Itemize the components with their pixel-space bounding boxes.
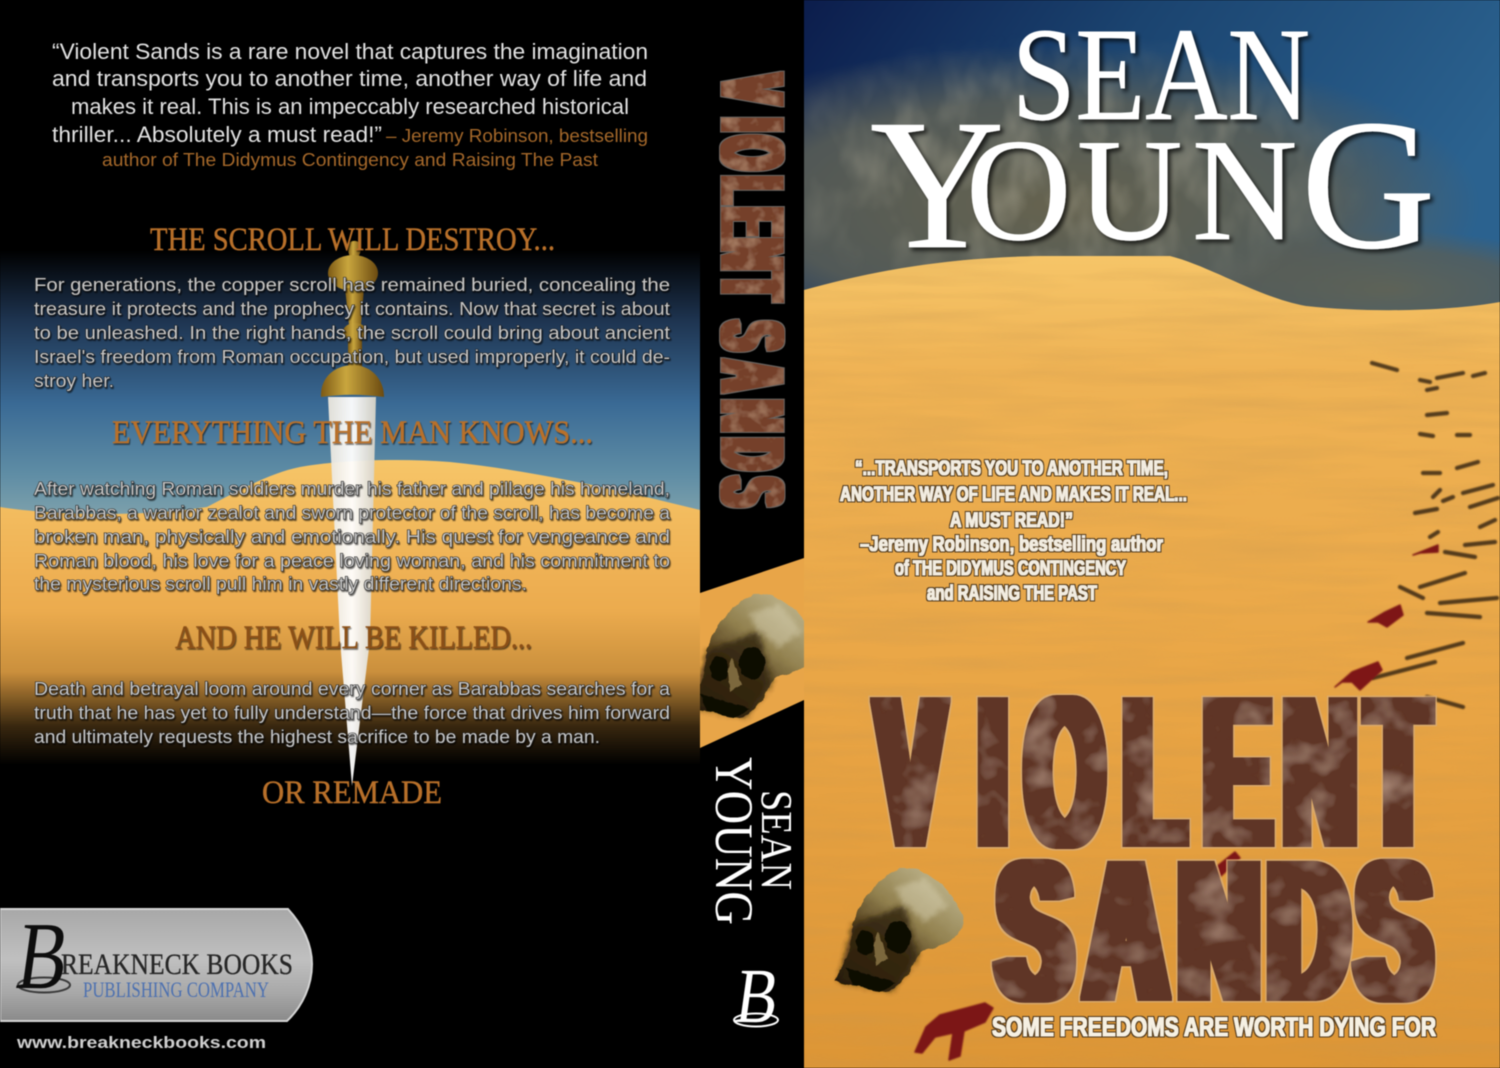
hilt bbox=[321, 241, 384, 397]
front review quote: ANOTHER WAY OF LIFE AND MAKES IT REAL... bbox=[840, 483, 1187, 506]
heading: everything the man knows: EVERYTHING THE MAN KNOWS... bbox=[112, 415, 593, 451]
blood splatter bbox=[915, 1003, 993, 1060]
book title: violent: VIOLENT bbox=[877, 654, 1429, 891]
paragraph: Barabbas bbox=[34, 479, 671, 594]
author name: young: O bbox=[966, 109, 1071, 271]
logo B mark: B bbox=[11, 902, 76, 1009]
quote: back cover review: and transports you to another time, another way of life and bbox=[52, 66, 647, 91]
paragraph: Barabbas: broken man, physically and emotionally. His quest for vengeance and bbox=[34, 527, 670, 547]
quote: back cover review: thriller... Absolutely a must read!” bbox=[52, 122, 382, 147]
paragraph: scroll: treasure it protects and the prophecy it contains. Now that secret is about bbox=[34, 299, 670, 319]
paragraph: Barabbas: Barabbas, a warrior zealot and sworn protector of the scroll, has become a bbox=[34, 503, 671, 523]
paragraph: Barabbas: After watching Roman soldiers murder his father and pillage his homeland, bbox=[34, 479, 670, 499]
paragraph: scroll: stroy her. bbox=[34, 371, 114, 391]
spine title: violent sands: VIOLENT SANDS bbox=[703, 75, 801, 506]
spine author: young: YOUNG bbox=[704, 757, 764, 925]
icon: sword bbox=[321, 241, 384, 786]
footprints bbox=[1372, 363, 1498, 707]
icon: publisher logo panel bbox=[0, 902, 312, 1021]
author name: young: G bbox=[1301, 82, 1435, 288]
blood stains bbox=[1190, 545, 1438, 892]
publisher name: REAKNECK BOOKS bbox=[61, 948, 293, 981]
quote: back cover review: – Jeremy Robinson, bestselling bbox=[386, 126, 648, 146]
spine background bbox=[700, 0, 804, 1068]
quote: back cover review: author of The Didymus Contingency and Raising The Past bbox=[102, 150, 598, 170]
paragraph: betrayal bbox=[34, 679, 671, 747]
paragraph: scroll bbox=[34, 275, 670, 391]
paragraph: scroll: For generations, the copper scroll has remained buried, concealing the bbox=[34, 275, 670, 295]
icon: spine skull bbox=[699, 594, 804, 722]
front review quote: of THE DIDYMUS CONTINGENCY bbox=[895, 557, 1126, 580]
paragraph: betrayal: truth that he has yet to fully understand—the force that drives him forward bbox=[34, 703, 670, 723]
front review quote: –Jeremy Robinson, bestselling author bbox=[860, 533, 1163, 556]
heading: or remade: OR REMADE bbox=[262, 775, 442, 811]
front review quote bbox=[840, 457, 1187, 605]
back cover background bbox=[0, 0, 700, 1068]
icon: front skull bbox=[835, 868, 963, 992]
icon: spine B logo: B bbox=[731, 952, 785, 1039]
front cover background bbox=[803, 0, 1500, 1068]
author name: young: U bbox=[1077, 109, 1182, 271]
quote: back cover review: makes it real. This is an impeccably researched historical bbox=[71, 94, 629, 119]
paragraph: Barabbas: the mysterious scroll pull him in vastly different directions. bbox=[34, 574, 527, 594]
heading: the scroll will destroy: THE SCROLL WILL DESTROY... bbox=[150, 222, 555, 258]
quote: back cover review: “Violent Sands is a rare novel that captures the imagination bbox=[52, 39, 648, 64]
paragraph: betrayal: Death and betrayal loom around every corner as Barabbas searches for a bbox=[34, 679, 671, 699]
paragraph: Barabbas: Roman blood, his love for a peace loving woman, and his commitment to bbox=[34, 551, 670, 571]
front review quote: and RAISING THE PAST bbox=[927, 582, 1097, 605]
author name: sean: SEAN bbox=[1012, 0, 1310, 148]
front review quote: “...TRANSPORTS YOU TO ANOTHER TIME, bbox=[855, 457, 1168, 480]
book title: sands: SANDS bbox=[998, 819, 1430, 1041]
website url: www.breakneckbooks.com bbox=[16, 1033, 266, 1052]
paragraph: scroll: Israel's freedom from Roman occupation, but used improperly, it could de- bbox=[34, 347, 670, 367]
heading: and he will be killed: AND HE WILL BE KILLED... bbox=[175, 620, 532, 656]
quote: back cover review bbox=[52, 39, 648, 170]
paragraph: scroll: to be unleashed. In the right hands, the scroll could bring about ancient bbox=[34, 323, 670, 343]
sand ripples bbox=[842, 260, 1470, 820]
blade bbox=[328, 397, 376, 786]
author name: young: Y bbox=[870, 82, 1004, 288]
paragraph: betrayal: and ultimately requests the highest sacrifice to be made by a man. bbox=[34, 727, 600, 747]
spine author: sean: SEAN bbox=[752, 790, 801, 890]
front review quote: A MUST READ!” bbox=[950, 509, 1073, 532]
author name: young: N bbox=[1192, 109, 1297, 271]
publisher subtitle: PUBLISHING COMPANY bbox=[83, 977, 269, 1002]
